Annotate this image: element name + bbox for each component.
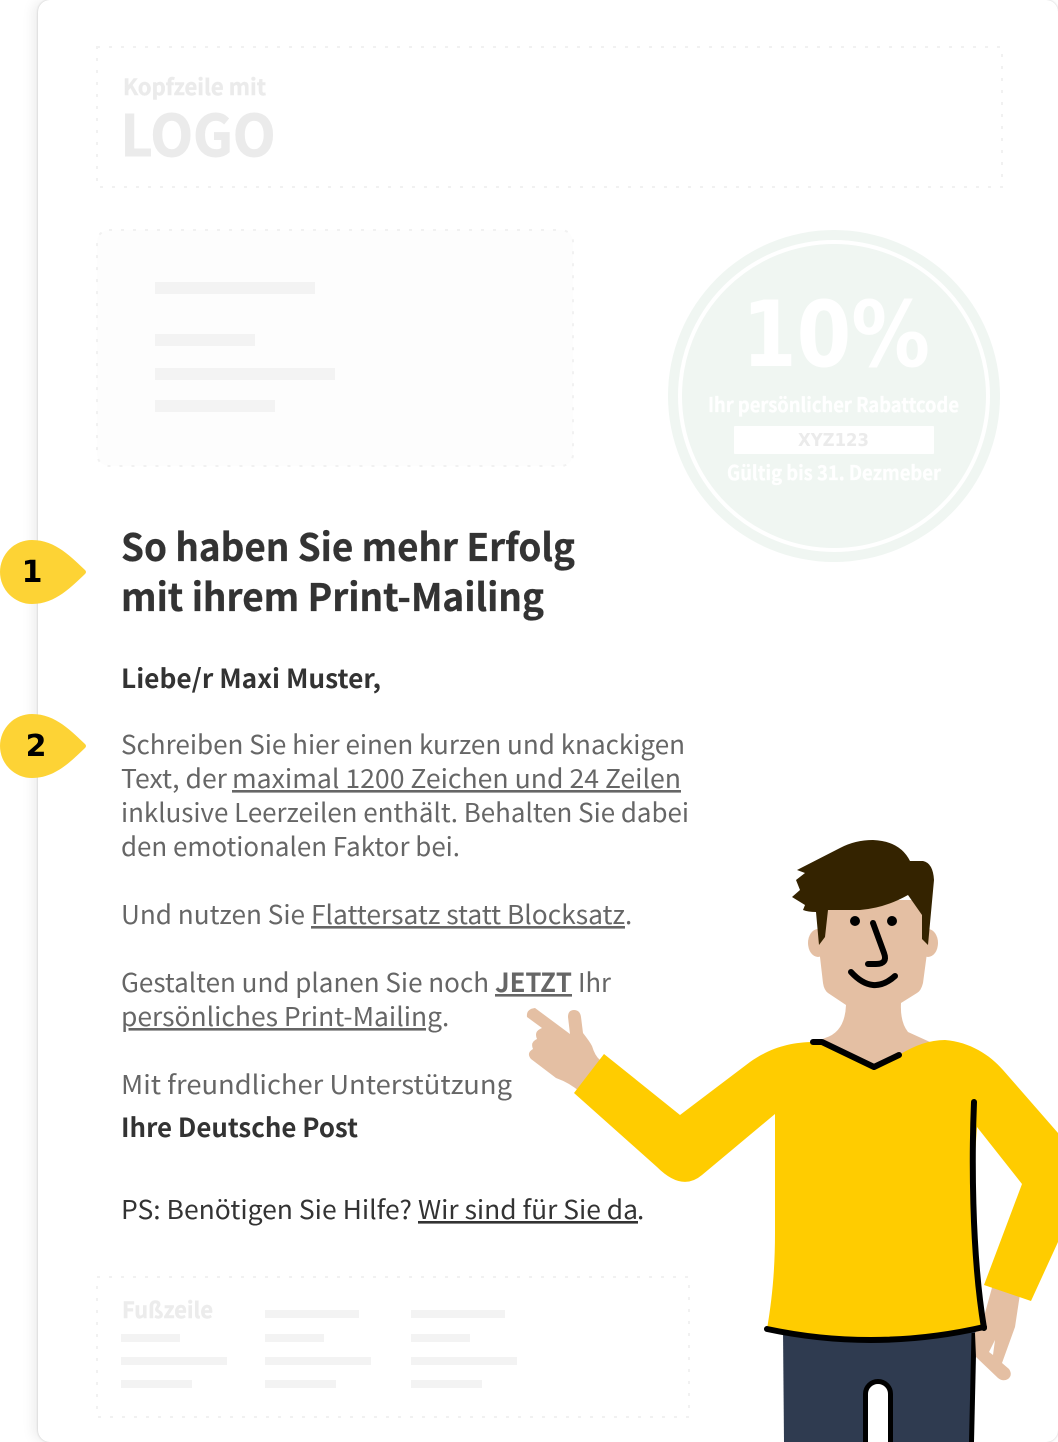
validity note: Gültig bis 31. Dezmeber <box>727 457 941 486</box>
body paragraph 3 <box>121 963 612 1034</box>
body paragraph 2: Flattersatz statt Blocksatz <box>311 895 625 932</box>
postscript <box>121 1190 644 1227</box>
footer column 2 <box>265 1310 371 1388</box>
pointing hand <box>527 1008 600 1092</box>
header label: Kopfzeile mit <box>123 70 266 102</box>
footer label: Fußzeile <box>122 1293 213 1325</box>
body paragraph 2: . <box>625 895 632 932</box>
body paragraph 3: JETZT <box>495 963 572 1000</box>
body paragraph 3: . <box>442 997 449 1034</box>
body paragraph 1: Schreiben Sie hier einen kurzen und knackigen <box>121 725 685 762</box>
panel: header with logo <box>97 47 1002 187</box>
body paragraph 3: Ihr <box>578 963 612 1000</box>
body paragraph 1: maximal 1200 Zeichen und 24 Zeilen <box>232 759 681 796</box>
panel: footer <box>97 1277 689 1417</box>
marker 2 <box>0 714 86 778</box>
postscript: PS: Benötigen Sie Hilfe? <box>121 1190 412 1227</box>
placeholder address lines <box>155 282 335 412</box>
salutation: Liebe/r Maxi Muster, <box>121 659 381 696</box>
head and neck <box>808 900 938 1070</box>
footer column 3 <box>411 1310 517 1388</box>
code field: XYZ123 <box>798 430 869 451</box>
body paragraph 3: persönliches Print-Mailing <box>121 997 442 1034</box>
heading: mit ihrem Print-Mailing <box>121 567 544 622</box>
logo placeholder: LOGO <box>120 91 276 173</box>
signature: Ihre Deutsche Post <box>121 1108 358 1145</box>
body paragraph 2 <box>121 895 632 932</box>
body paragraph 2: Und nutzen Sie <box>121 895 305 932</box>
postscript: . <box>637 1190 644 1227</box>
panel: address field <box>97 230 573 466</box>
marker 1: 1 <box>22 555 42 590</box>
illustration: man pointing at the text <box>527 840 1058 1442</box>
yellow sweater <box>574 1040 1058 1340</box>
lower hand <box>975 1284 1020 1380</box>
closing line: Mit freundlicher Unterstützung <box>121 1065 512 1102</box>
discount percentage: 10% <box>742 283 930 388</box>
heading: So haben Sie mehr Erfolg <box>121 517 575 572</box>
discount badge <box>668 230 1000 562</box>
body paragraph 1: inklusive Leerzeilen enthält. Behalten Sie dabei <box>121 793 689 830</box>
code field <box>734 426 934 454</box>
body paragraph 1 <box>121 725 689 864</box>
body paragraph 1: den emotionalen Faktor bei. <box>121 827 460 864</box>
marker 1 <box>0 540 86 604</box>
hair <box>792 840 934 945</box>
sweater outlines <box>767 1042 984 1340</box>
body paragraph 3: Gestalten und planen Sie noch <box>121 963 489 1000</box>
badge caption: Ihr persönlicher Rabattcode <box>708 389 959 418</box>
trousers <box>783 1330 976 1442</box>
footer column 1 <box>121 1334 227 1388</box>
heading <box>121 517 575 622</box>
body paragraph 1: Text, der <box>121 759 228 796</box>
postscript: Wir sind für Sie da <box>418 1190 638 1227</box>
face features <box>850 916 897 985</box>
marker 2: 2 <box>26 729 46 764</box>
